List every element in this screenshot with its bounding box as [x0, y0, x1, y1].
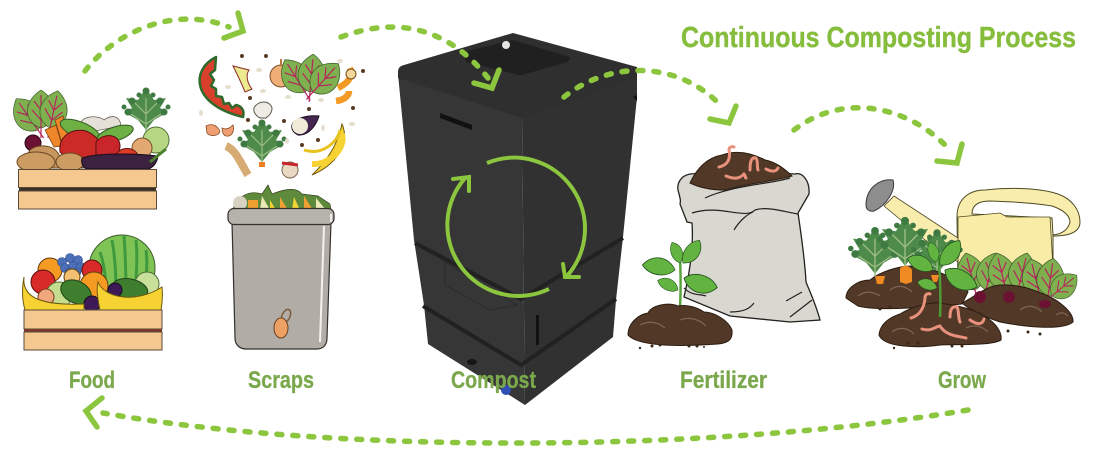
panel: fertilizer — [628, 147, 820, 349]
arrow: food to scraps — [85, 13, 243, 71]
label: scraps: Scraps — [248, 367, 314, 394]
label: grow: Grow — [938, 367, 986, 394]
panel: grow — [846, 180, 1084, 349]
apple core — [233, 66, 252, 92]
eggshells — [206, 125, 234, 136]
arrow: scraps to compost — [341, 27, 499, 88]
crate: fruit — [24, 310, 162, 350]
panel: scraps — [199, 53, 365, 349]
bin lid — [228, 208, 334, 224]
arrow: fertilizer to grow — [794, 108, 962, 163]
carrots — [875, 266, 939, 284]
seeds — [199, 54, 365, 147]
blue tap — [501, 385, 511, 395]
bin body — [232, 222, 331, 349]
eggplant — [292, 116, 319, 135]
watermelon rind — [200, 57, 244, 117]
panel: food crates — [5, 88, 170, 350]
lid — [463, 40, 570, 75]
soil mound — [628, 304, 732, 345]
radish — [282, 162, 298, 178]
panel: compost bin — [398, 33, 637, 405]
beet leaves — [953, 250, 1084, 310]
chard — [273, 53, 348, 108]
onion — [270, 59, 292, 87]
crate: vegetables — [18, 170, 156, 209]
arrow: grow back to food — [86, 398, 968, 443]
cycle arrows — [447, 158, 585, 296]
vegetables — [5, 88, 170, 172]
top face — [398, 33, 637, 118]
potato peel — [226, 146, 248, 175]
soil crumbs — [639, 344, 705, 349]
vent slots — [440, 95, 637, 345]
soil in sack — [690, 152, 792, 190]
watering can — [866, 180, 1080, 285]
banana peels — [304, 124, 344, 175]
seedling — [641, 238, 719, 320]
knob — [502, 41, 510, 49]
carrot greens — [848, 217, 963, 276]
right soil — [962, 285, 1073, 327]
sack folds — [684, 178, 812, 317]
drain — [467, 359, 477, 365]
band straps — [415, 238, 623, 365]
sack — [678, 172, 820, 322]
front label plate — [445, 262, 517, 310]
left soil — [846, 266, 968, 309]
right face — [522, 74, 637, 405]
beets — [974, 291, 1051, 308]
carrot top — [238, 120, 286, 167]
soil crumbs — [878, 306, 1042, 349]
left face — [398, 74, 525, 405]
center plant — [906, 238, 980, 317]
bin contents — [233, 185, 331, 210]
arrow: compost to fertilizer — [564, 70, 736, 123]
label: compost: Compost — [451, 367, 536, 394]
worms — [911, 294, 984, 338]
bin tag — [274, 308, 293, 338]
center soil — [879, 303, 1001, 347]
worms — [719, 147, 778, 178]
fruit — [23, 235, 162, 312]
mushroom — [254, 102, 272, 118]
orange peel — [336, 68, 356, 101]
label: fertilizer: Fertilizer — [680, 367, 767, 394]
label: food: Food — [69, 367, 115, 394]
